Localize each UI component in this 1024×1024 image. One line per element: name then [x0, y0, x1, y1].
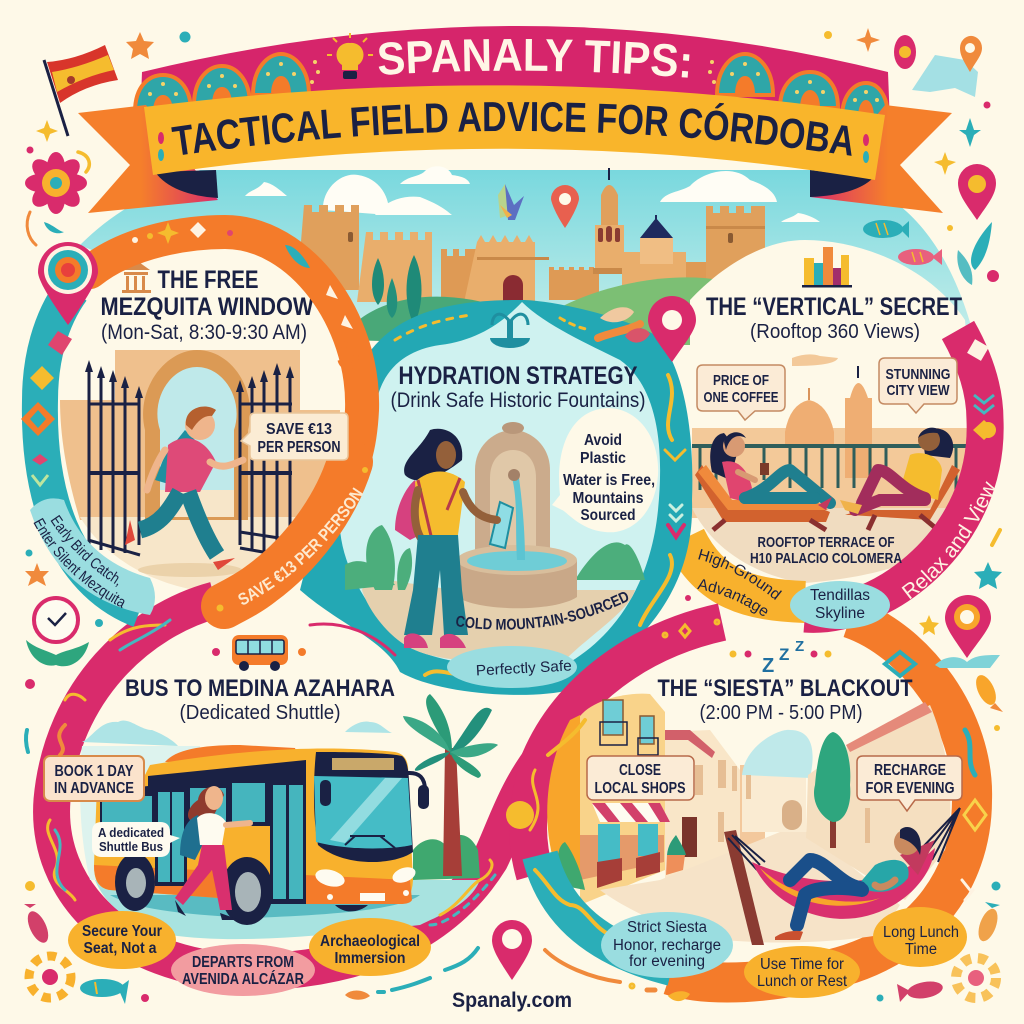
ribbon: yellow high-ground band [685, 538, 805, 602]
subheading: hydration strategy: (Drink Safe Historic Fountains) [390, 389, 646, 412]
icon: teal fish bottom [80, 979, 149, 1004]
ribbon: magenta bottom right band [528, 622, 722, 875]
gate spikes [85, 360, 294, 398]
icon: fountain [490, 314, 530, 348]
ribbon motifs: right [967, 339, 996, 440]
siesta scene [547, 694, 960, 945]
panel: hydration band outer [300, 300, 692, 695]
icon: pink pin centre right [648, 296, 696, 362]
mid decorations left [25, 550, 103, 627]
sky panel [80, 170, 975, 340]
bubble: strict siesta honor: Honor, recharge [613, 937, 721, 954]
fountain plaza [362, 580, 635, 662]
mandala medallion on ribbon [506, 801, 534, 829]
ground [80, 517, 302, 590]
yellow building [580, 694, 665, 905]
rooftop floor [692, 508, 968, 583]
icon: teal fish [863, 220, 909, 238]
callout: close local shops: LOCAL SHOPS [594, 780, 686, 797]
clouds [245, 166, 820, 222]
text: relax and view: Relax and View [902, 481, 994, 600]
bubble: archaeological immersion: Archaeological [320, 933, 420, 950]
callout: book 1 day [44, 756, 144, 801]
callout: recharge for evening: FOR EVENING [866, 780, 954, 797]
figure: running man [125, 406, 243, 577]
mezquita scene [60, 350, 340, 590]
banner ornaments: ribbon ends [158, 132, 869, 163]
bubble: strict siesta honor: Strict Siesta [627, 919, 707, 936]
callout: dedicated shuttle bus: Shuttle Bus [99, 839, 163, 854]
heading: bus to medina azahara: (Dedicated Shuttle) [180, 702, 340, 724]
icon: folded map with pin [912, 36, 982, 97]
callout: save 13 euro: SAVE €13 [266, 421, 332, 438]
heading: vertical secret: (Rooftop 360 Views) [750, 321, 920, 343]
text: high-ground advantage: High-Ground [698, 549, 782, 600]
callout: dedicated shuttle bus [92, 822, 180, 857]
bubble: use time for lunch [744, 946, 860, 998]
banner tail: right [810, 105, 952, 213]
bubble: departs from avenida: AVENIDA ALCÁZAR [182, 969, 304, 988]
icon: pink fish bottom right [876, 979, 944, 1002]
icon: pink pin bottom centre [492, 920, 532, 980]
top decorations right [824, 28, 990, 175]
ribbon: magenta relax band [805, 330, 985, 614]
text: save 13 per person ribbon: SAVE €13 PER PERSON [238, 487, 364, 605]
heading: the free mezquita window: THE FREE [158, 266, 258, 294]
heading: tactical field advice: TACTICAL FIELD ADVICE FOR CÓRDOBA [171, 102, 852, 156]
ribbon: teal lower left of siesta [540, 855, 672, 968]
callout: price of one coffee: PRICE OF [713, 372, 769, 389]
icon: zzz sleep: Z [779, 645, 789, 664]
banner: yellow ribbon [144, 85, 885, 180]
banner fold: left [155, 170, 218, 198]
callout: save 13 euro [241, 413, 348, 460]
icon: sky location pin [551, 185, 579, 228]
ribbon: orange right band [670, 618, 972, 982]
figure: man in hammock [775, 827, 921, 940]
bubble: early bird catch: Early Bird Catch, [50, 514, 118, 587]
cream buildings [665, 730, 740, 880]
icon: bus [212, 635, 306, 671]
heading: the free mezquita window: MEZQUITA WINDOW [100, 293, 314, 321]
icon: zzz sleep: Z [795, 638, 804, 655]
ribbon: teal left band [40, 290, 140, 610]
bubble: archaeological immersion: Immersion [334, 950, 406, 967]
icon: pink fish [898, 249, 942, 265]
railing [692, 446, 968, 490]
shop awning and windows [558, 803, 697, 890]
bubble: early bird catch: Enter Silent Mezquita [34, 518, 124, 608]
banner fold: right [810, 170, 873, 197]
heading: hydration strategy: HYDRATION STRATEGY [398, 362, 638, 390]
bubble: use time for lunch: Lunch or Rest [757, 973, 848, 990]
callout: avoid plastic: Plastic [580, 450, 626, 467]
icon: mandala pin left [38, 242, 98, 325]
panel: rooftop scene [692, 354, 968, 583]
icon: orange fish right [972, 672, 1003, 731]
icon: spanish flag [44, 45, 118, 136]
icon: teal leaf sprig [947, 222, 999, 285]
callout: price of one coffee [697, 365, 785, 420]
heading: the free mezquita window: (Mon-Sat, 8:30-9:30 AM) [101, 321, 307, 344]
callout: recharge for evening: RECHARGE [874, 762, 946, 779]
bubble: secure your seat: Secure Your [82, 923, 162, 940]
bubble: use time for lunch: Use Time for [760, 956, 844, 973]
bubble: tendillas skyline: Tendillas [810, 587, 870, 604]
banner: magenta top [140, 26, 890, 125]
heading: the free mezquita window [100, 266, 314, 344]
heading: siesta blackout [658, 675, 913, 724]
bubble: tendillas skyline [790, 581, 890, 629]
hammock [724, 808, 960, 945]
top decorations left [26, 32, 190, 245]
callout: avoid plastic [552, 408, 658, 532]
heading: vertical secret: THE “VERTICAL” SECRET [706, 293, 962, 321]
bus scene [80, 694, 498, 939]
callout: stunning city view: CITY VIEW [886, 382, 950, 399]
text: cold mountain-sourced: COLD MOUNTAIN-SOURCED [456, 592, 628, 630]
panel: free mezquita interior [55, 245, 350, 598]
icon: pin right with map ribbon [935, 595, 1000, 668]
bubble: secure your seat: Seat, Not a [84, 940, 157, 957]
rolling hills and cypress trees [340, 255, 720, 345]
bubble: tendillas skyline: Skyline [815, 605, 865, 622]
callout: avoid plastic: Mountains [572, 490, 644, 507]
callout: close local shops: CLOSE [619, 762, 661, 779]
bottom centre dashes [345, 948, 690, 1001]
bubble: departs from avenida: DEPARTS FROM [192, 954, 294, 971]
bubble: strict siesta honor: for evening [629, 953, 705, 970]
figure: woman filling bottle [395, 429, 497, 648]
bubble: departs from avenida [171, 944, 315, 996]
bubble: long lunch time [873, 907, 967, 967]
bubble: perfectly safe: Perfectly Safe [475, 658, 572, 680]
band motifs: hydration [310, 307, 685, 675]
stone fountain [457, 422, 577, 608]
icon: colourful bird [498, 184, 524, 220]
banner tail: left [78, 105, 218, 213]
plants by fountain [345, 525, 645, 590]
callout: avoid plastic: Water is Free, [563, 472, 655, 489]
balcony windows [600, 700, 658, 755]
icon: teal fish right lower [975, 882, 1001, 944]
text: rooftop terrace label: ROOFTOP TERRACE OF [758, 534, 894, 551]
building windows [695, 760, 870, 843]
bushes [413, 835, 480, 880]
icon: temple [122, 260, 151, 293]
banner ornaments: right scallops [708, 54, 888, 118]
callout: book 1 day: IN ADVANCE [54, 780, 134, 797]
heading: vertical secret [706, 293, 962, 343]
icon: yellow flower left [29, 956, 71, 998]
sky patch [742, 730, 813, 778]
bubble: long lunch time: Long Lunch [883, 924, 959, 941]
bubble: secure your seat [68, 911, 176, 969]
panel: vertical secret background [690, 240, 985, 610]
shuttle bus [94, 745, 429, 925]
footer: spanaly.com: Spanaly.com [452, 989, 572, 1012]
text: rooftop terrace label [750, 534, 902, 567]
ground street [600, 832, 900, 942]
panel: hydration interior [340, 302, 660, 668]
ribbon: magenta bottom left band [52, 600, 548, 972]
rooftop skyline [692, 354, 967, 518]
icon: pink fish lower left [24, 679, 52, 946]
text: rooftop terrace label: H10 PALACIO COLOMERA [750, 550, 902, 567]
castle and cathedral skyline [297, 168, 765, 307]
figure: woman boarding [175, 786, 250, 920]
orange wall [547, 715, 580, 875]
ribbon motifs: left panel [21, 222, 368, 612]
icon: flower left [25, 152, 87, 214]
callout: save 13 euro: PER PERSON [258, 439, 340, 456]
bubble: early bird catch [30, 498, 155, 615]
icon: flower bottom right [956, 958, 996, 998]
callout: avoid plastic: Avoid [584, 432, 622, 449]
road [95, 880, 480, 939]
callout: book 1 day: BOOK 1 DAY [54, 763, 134, 780]
banner ornaments: left scallops [135, 54, 320, 112]
ribbon: orange top and right band [90, 232, 362, 606]
woman on left lounger [695, 432, 832, 530]
heading: bus to medina azahara [125, 675, 395, 724]
heading: bus to medina azahara: BUS TO MEDINA AZAHARA [125, 675, 395, 702]
bubble: archaeological immersion [309, 918, 431, 976]
callout: stunning city view [879, 358, 957, 413]
text: high-ground advantage: Advantage [697, 579, 768, 616]
moorish arch [143, 350, 250, 520]
ribbon motifs: bottom bands [48, 620, 986, 935]
heading: siesta blackout: (2:00 PM - 5:00 PM) [700, 702, 862, 724]
callout: close local shops [587, 756, 694, 800]
icon: light bulb [327, 33, 373, 79]
palm tree [403, 694, 498, 876]
bubble: perfectly safe [447, 646, 577, 688]
iron gate right [240, 370, 292, 557]
bubble: long lunch time: Time [905, 941, 937, 958]
sandstone wall [60, 350, 340, 520]
callout: recharge for evening [857, 756, 962, 811]
icon: city skyline [802, 247, 852, 288]
woman on right lounger [840, 428, 960, 530]
iron gate left [88, 365, 140, 555]
mid decorations right [685, 530, 1002, 635]
bubble: strict siesta honor [601, 912, 733, 978]
icon: zzz sleep: Z [762, 655, 774, 677]
icon: clock with leaves [26, 598, 89, 666]
callout: stunning city view: STUNNING [886, 366, 950, 383]
heading: siesta blackout: THE “SIESTA” BLACKOUT [658, 675, 913, 702]
icon: zzz sleep [730, 638, 832, 677]
callout: avoid plastic: Sourced [580, 507, 636, 524]
icon: pink pin upper right [958, 164, 996, 220]
tree [814, 732, 850, 848]
sky patch [80, 746, 200, 880]
callout: dedicated shuttle bus: A dedicated [98, 825, 164, 840]
callout: price of one coffee: ONE COFFEE [704, 389, 778, 406]
right buildings [806, 705, 950, 900]
heading: spanaly tips: SPANALY TIPS: [378, 39, 690, 78]
